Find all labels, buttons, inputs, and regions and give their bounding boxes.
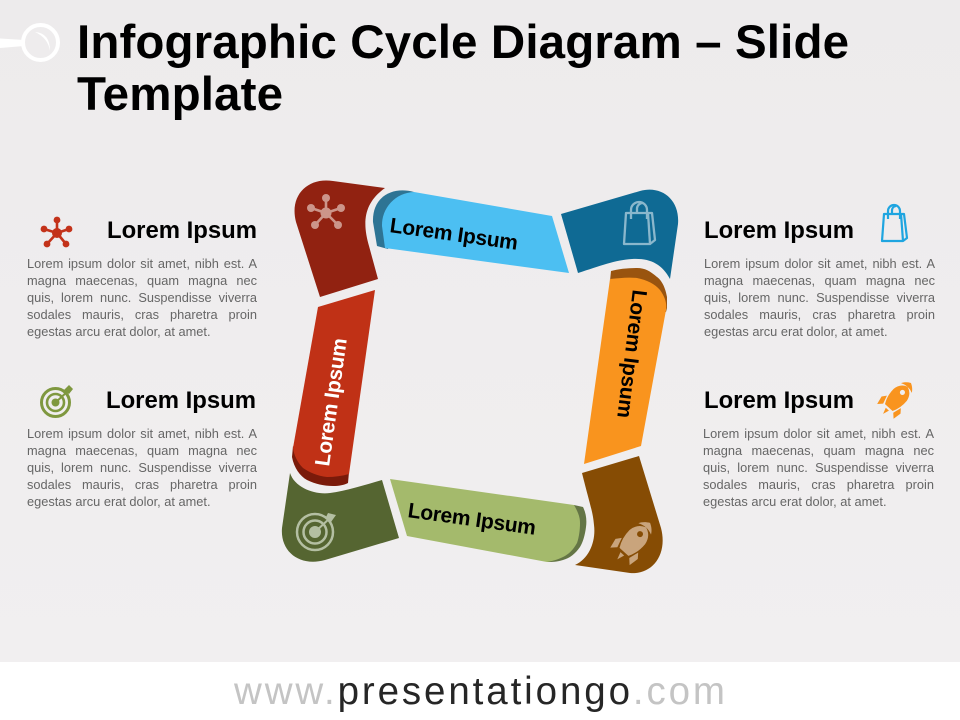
pin decoration: [0, 25, 58, 60]
icon: target small: [40, 385, 73, 418]
icon: shopping bag: [624, 202, 655, 244]
segment: light green bar: Lorem Ipsum: [406, 499, 537, 540]
body text: [703, 426, 934, 509]
text block: bottom left: [27, 385, 257, 509]
body text: Lorem ipsum dolor sit amet, nibh est. A: [27, 426, 257, 441]
body text: sodales mauris, cras pharetra proin: [27, 307, 257, 322]
body text: egestas arcu erat dolor, at amet.: [704, 324, 888, 339]
segment: brown corner with rocket icon: [575, 456, 663, 573]
title: Infographic Cycle Diagram – Slide: [77, 16, 849, 69]
text block: top right: [704, 204, 935, 339]
body text: egestas arcu erat dolor, at amet.: [703, 494, 887, 509]
footer url: www.presentationgo.com: [233, 670, 725, 713]
title: Template: [77, 68, 283, 121]
body text: sodales mauris, cras pharetra proin: [704, 307, 935, 322]
icon: rocket small: [877, 382, 912, 419]
body text: Lorem ipsum dolor sit amet, nibh est. A: [27, 256, 257, 271]
text block: top left: [27, 216, 257, 339]
segment: orange bar: [584, 268, 667, 464]
segment: light blue bar: [373, 190, 569, 273]
body text: magna maecenas, quam magna nec: [27, 443, 257, 458]
icon: rocket: [606, 513, 661, 569]
text block: bottom right: [703, 382, 934, 509]
segment: dark red corner with network icon: [295, 180, 385, 297]
segment: red bar: [292, 290, 375, 486]
segment: light green bar: [390, 479, 586, 562]
body text: quis, lorem nunc. Suspendisse viverra: [27, 290, 257, 305]
segment: light blue bar: Lorem Ipsum: [388, 214, 519, 255]
body text: quis, lorem nunc. Suspendisse viverra: [703, 460, 934, 475]
heading: Lorem Ipsum: [107, 216, 257, 244]
segment: red bar: Lorem Ipsum: [311, 337, 352, 468]
heading: Lorem Ipsum: [704, 386, 854, 414]
body text: egestas arcu erat dolor, at amet.: [27, 324, 211, 339]
body text: quis, lorem nunc. Suspendisse viverra: [27, 460, 257, 475]
icon: network small: [40, 216, 72, 248]
body text: magna maecenas, quam magna nec: [704, 273, 935, 288]
segment: orange bar: Lorem Ipsum: [612, 289, 651, 419]
body text: sodales mauris, cras pharetra proin: [703, 477, 934, 492]
segment: dark blue corner with bag icon: [561, 190, 678, 279]
title: [77, 16, 849, 121]
body text: [27, 426, 257, 509]
body text: magna maecenas, quam magna nec: [27, 273, 257, 288]
cycle diagram: [282, 180, 678, 573]
body text: egestas arcu erat dolor, at amet.: [27, 494, 211, 509]
heading: Lorem Ipsum: [106, 386, 256, 414]
icon: network: [307, 194, 345, 229]
body text: [27, 256, 257, 339]
icon: target: [297, 513, 336, 550]
body text: Lorem ipsum dolor sit amet, nibh est. A: [703, 426, 934, 441]
body text: sodales mauris, cras pharetra proin: [27, 477, 257, 492]
heading: Lorem Ipsum: [704, 216, 854, 244]
segment: olive corner with target icon: [282, 473, 399, 562]
body text: Lorem ipsum dolor sit amet, nibh est. A: [704, 256, 935, 271]
icon: bag small: [880, 204, 908, 242]
body text: [704, 256, 935, 339]
body text: magna maecenas, quam magna nec: [703, 443, 934, 458]
body text: quis, lorem nunc. Suspendisse viverra: [704, 290, 935, 305]
